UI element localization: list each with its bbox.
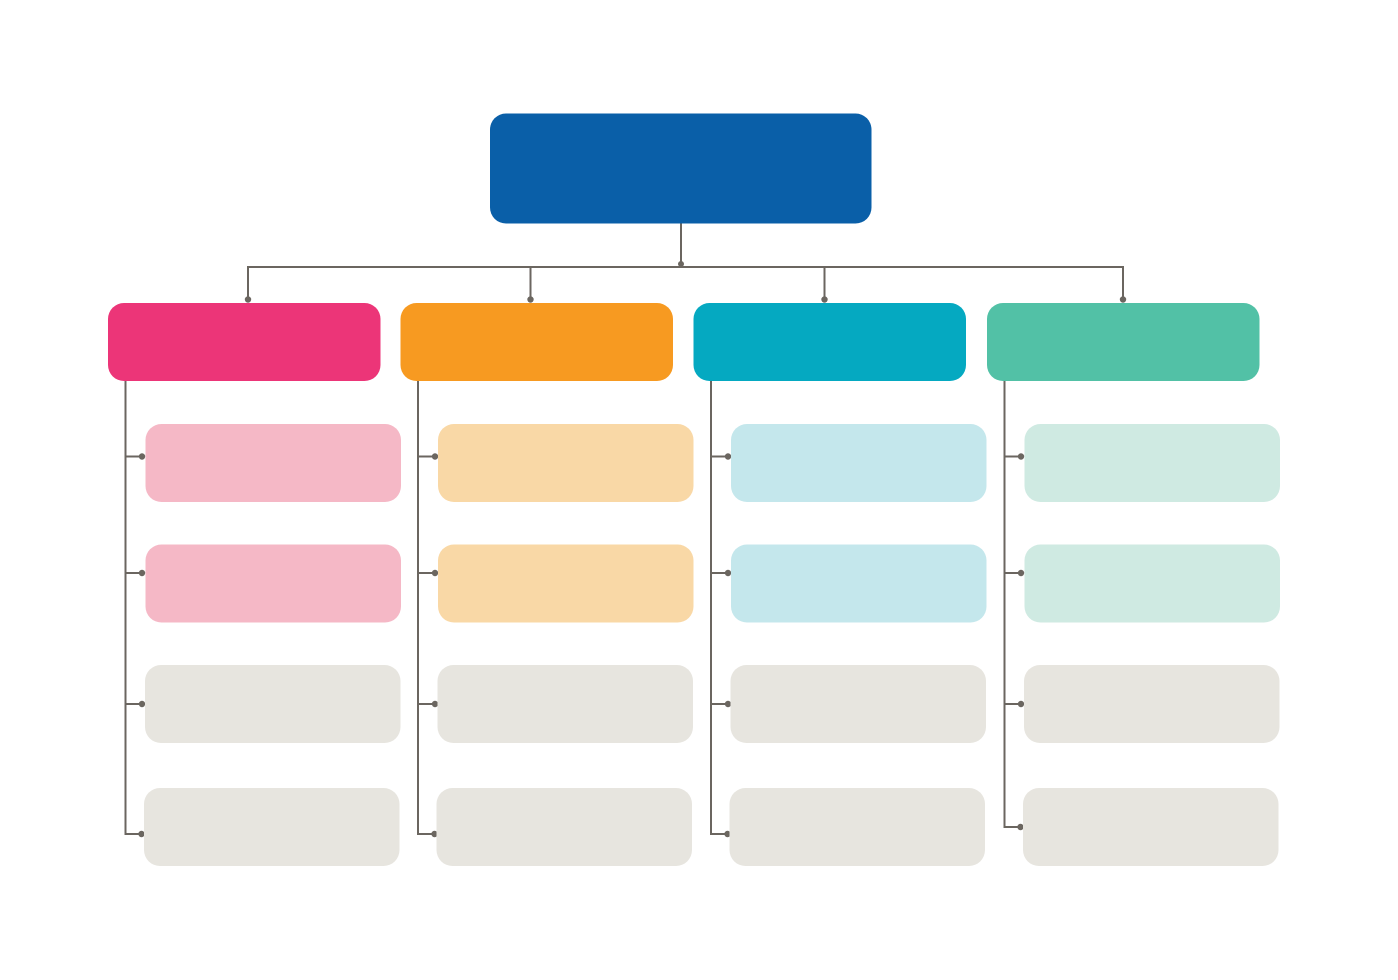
- connector: column 1 tree: [126, 380, 145, 837]
- item box: light blue 1: [731, 424, 986, 502]
- item box: grey 4: [436, 788, 692, 866]
- item box: orange 1: [438, 424, 694, 502]
- header box: green: [987, 303, 1260, 381]
- item box: grey 3: [1024, 665, 1280, 743]
- item box: light green 2: [1024, 544, 1280, 622]
- root box: [490, 114, 872, 224]
- item box: grey 4: [730, 788, 985, 866]
- connector: column 2 tree: [418, 380, 438, 837]
- connector: column 3 tree: [711, 380, 731, 837]
- item box: grey 3: [145, 665, 400, 743]
- panel: column 1: [108, 303, 401, 866]
- item box: grey 3: [730, 665, 986, 743]
- header box: pink: [108, 303, 380, 381]
- connector: root to column headers: [245, 223, 1126, 303]
- connector: column 4 tree: [1004, 380, 1024, 830]
- panel: column 3: [694, 303, 986, 866]
- item box: pink 1: [146, 424, 401, 502]
- panel: column 4: [987, 303, 1280, 866]
- item box: grey 4: [1023, 788, 1278, 866]
- item box: light green 1: [1024, 424, 1280, 502]
- item box: grey 3: [438, 665, 693, 743]
- header box: teal: [694, 303, 966, 381]
- item box: pink 2: [146, 544, 401, 622]
- item box: grey 4: [144, 788, 400, 866]
- item box: light blue 2: [731, 544, 986, 622]
- panel: column 2: [400, 303, 694, 866]
- item box: orange 2: [438, 544, 694, 622]
- header box: orange: [400, 303, 673, 381]
